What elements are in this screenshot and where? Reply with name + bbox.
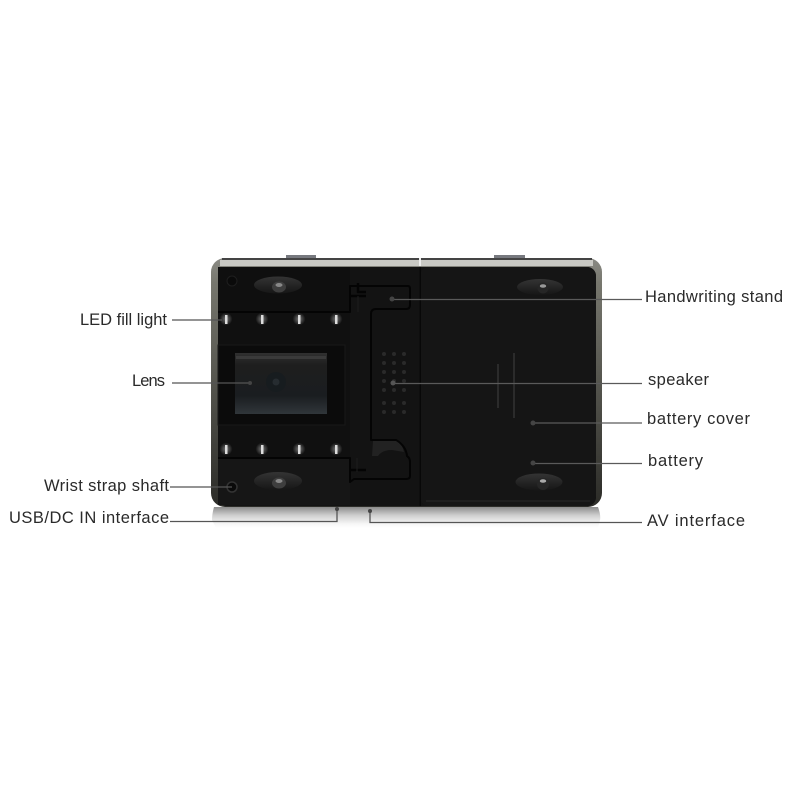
label: Wrist strap shaft: Wrist strap shaft bbox=[44, 477, 169, 495]
label: Lens bbox=[132, 372, 252, 390]
label: LED fill light: LED fill light bbox=[80, 311, 167, 329]
label: Handwriting stand bbox=[390, 288, 783, 306]
label: USB/DC IN interface bbox=[9, 507, 339, 527]
label: AV interface: AV interface bbox=[647, 512, 745, 530]
top buttons bbox=[286, 255, 525, 260]
seam bbox=[420, 267, 421, 506]
label: battery cover bbox=[530, 410, 750, 428]
label: speaker: speaker bbox=[648, 371, 710, 389]
reflection under device bbox=[212, 507, 600, 528]
label: battery cover: battery cover bbox=[647, 410, 750, 428]
label: Handwriting stand: Handwriting stand bbox=[645, 288, 783, 306]
label: battery: battery bbox=[648, 452, 704, 470]
label: AV interface bbox=[368, 509, 745, 530]
screw covers bbox=[254, 276, 563, 490]
LED fill lights bbox=[220, 312, 342, 456]
small holes bbox=[227, 276, 237, 492]
label: USB/DC IN interface: USB/DC IN interface bbox=[9, 509, 169, 527]
lens bbox=[218, 345, 345, 425]
handwriting stand outline bbox=[218, 283, 410, 482]
label: speaker bbox=[390, 371, 710, 389]
speaker holes bbox=[382, 352, 406, 414]
label: battery bbox=[530, 452, 704, 470]
device body bbox=[211, 258, 602, 507]
battery cover slots bbox=[497, 353, 515, 418]
label: Lens: Lens bbox=[132, 372, 165, 390]
